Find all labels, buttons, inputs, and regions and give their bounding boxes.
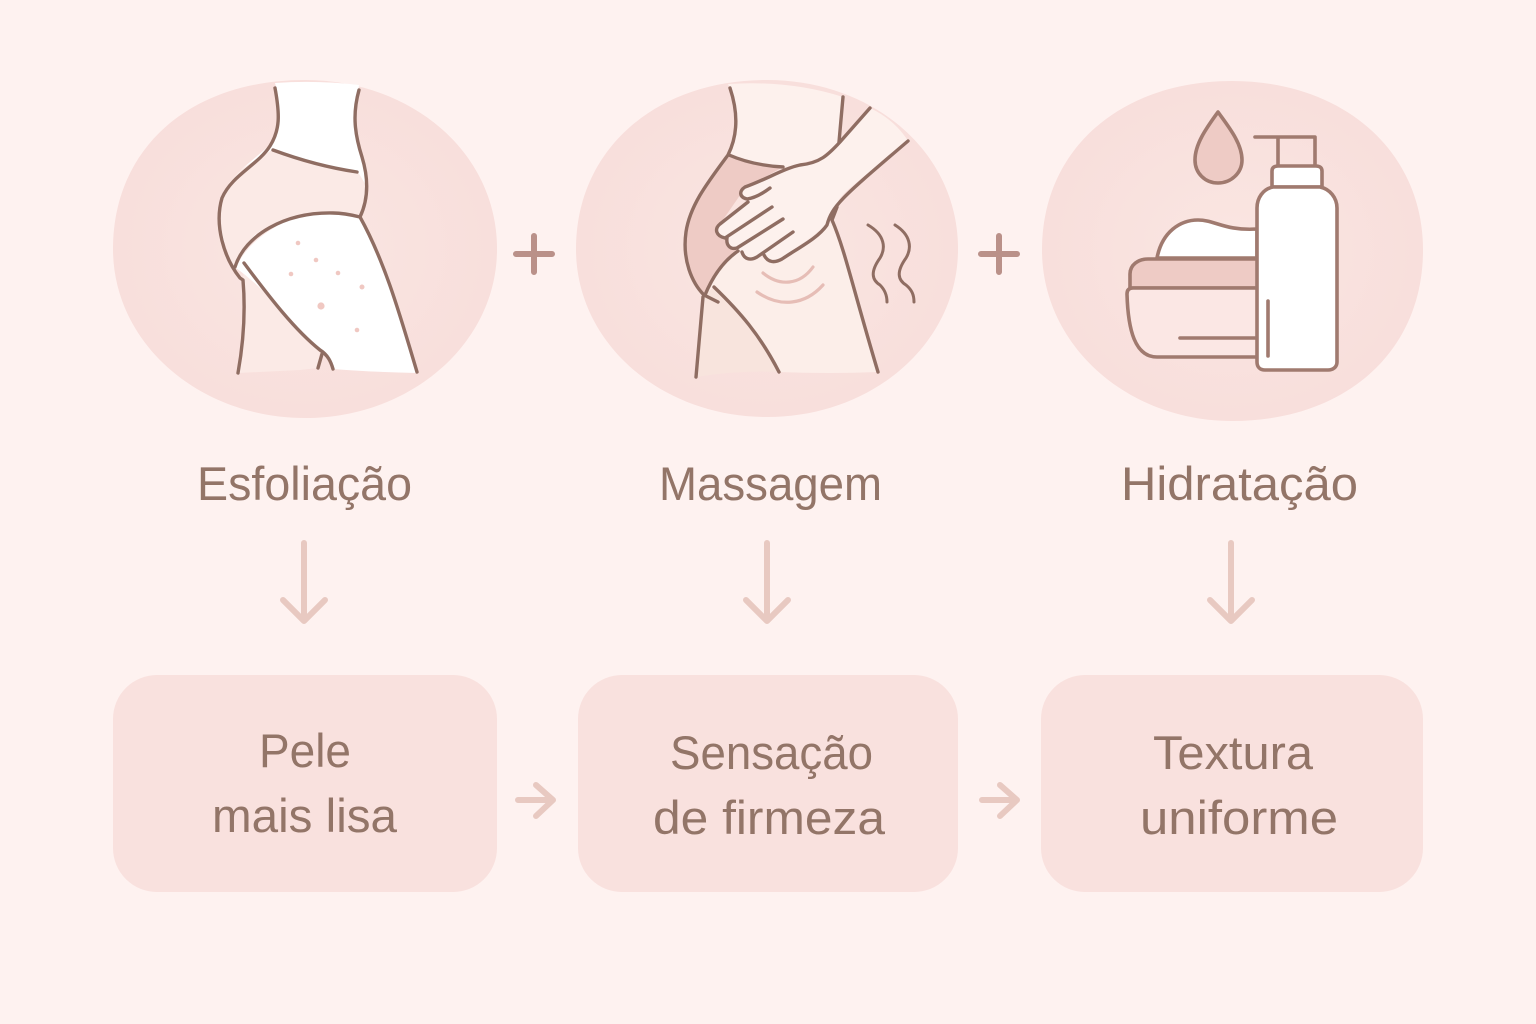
body and hand outline [685,88,908,377]
heading: Hidratação: Hidratação [1121,457,1358,510]
icon: cream jar [1127,220,1258,357]
text: Textura uniforme: Textura [1153,726,1314,779]
icon: plus one [516,236,552,272]
text: Sensação de firmeza: Sensação [670,726,873,779]
body outline [219,88,417,373]
icon: pump bottle [1255,137,1337,370]
arrow: right two [982,785,1017,816]
panel: massage illustration [576,80,958,417]
text: Pele mais lisa: mais lisa [212,789,398,842]
text: Sensação de firmeza: de firmeza [653,791,886,844]
text: Textura uniforme [1140,726,1338,844]
skin texture dots [289,241,364,332]
text: Sensação de firmeza [653,726,886,844]
panel: result firmness [578,675,958,892]
icon: water drop [1195,112,1242,183]
text: Pele mais lisa: Pele [259,724,351,777]
rubbing arcs [757,267,823,302]
arrow: down two [746,543,788,621]
arrow: down three [1210,543,1252,621]
heading: Massagem: Massagem [659,457,882,510]
text: Pele mais lisa [212,724,398,842]
panel: result smoother skin [113,675,497,892]
panel: hydration illustration [1042,81,1423,421]
text: Textura uniforme: uniforme [1140,791,1338,844]
motion waves [868,225,914,302]
icon: plus two [981,236,1017,272]
panel: exfoliation illustration [113,80,497,418]
arrow: down one [283,543,325,621]
heading: Esfoliação: Esfoliação [197,457,412,510]
hand and arm fill [717,108,908,262]
arrow: right one [518,785,553,816]
panel: result uniform texture [1041,675,1423,892]
